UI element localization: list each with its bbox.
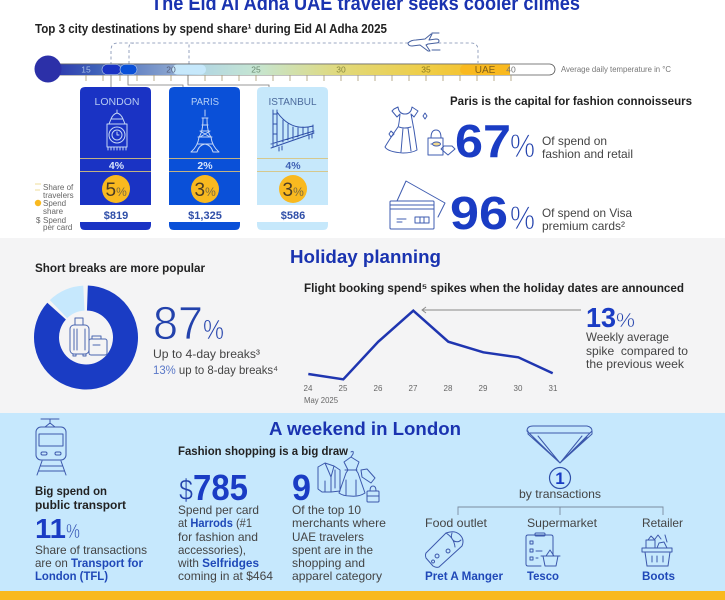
stat: 87 percent short breaks: [153, 297, 278, 377]
heading: flight booking: Flight booking spend⁵ spikes when the holiday dates are announced: [304, 281, 684, 295]
stat: 9 of top 10 merchants: Of the top 10: [292, 503, 361, 517]
panel: Istanbul card: 4%: [285, 160, 301, 172]
panel: Paris card: [169, 87, 240, 230]
stat: 87 percent short breaks: %: [203, 314, 224, 345]
spend share badge: [279, 175, 307, 203]
stat: 96 percent Visa premium cards: [450, 187, 632, 239]
merchant: Boots: Boots: [642, 569, 675, 583]
stat: 96 percent Visa premium cards: 96: [450, 187, 508, 239]
heading: A weekend in London: A weekend in London: [269, 419, 461, 439]
temperature thermometer scale: 40: [506, 64, 516, 74]
panel: London card: 4%: [109, 160, 125, 172]
legend: Share of: [43, 183, 74, 192]
icon: plane: [408, 33, 440, 51]
merchant: Tesco: Tesco: [527, 569, 559, 583]
merchant: Tesco: [526, 516, 598, 583]
heading: short breaks: Short breaks are more popular: [35, 261, 205, 275]
temperature thermometer scale: 25: [251, 64, 261, 74]
stat: 785 dollars at Harrods: $: [179, 474, 193, 507]
text block: public transport: %: [66, 521, 80, 543]
icon: medal: 1: [555, 469, 565, 488]
temperature thermometer scale: 15: [81, 64, 91, 74]
icon: credit cards: [390, 181, 445, 229]
panel: Paris card: $1,325: [188, 210, 222, 222]
stat: 96 percent Visa premium cards: Of spend on Visa: [542, 206, 632, 220]
stat: 67 percent fashion and retail: fashion and retail: [542, 147, 633, 161]
stat: 785 dollars at Harrods: accessories),: [178, 543, 246, 557]
merchant: Pret A Manger: [425, 516, 503, 583]
stat: 96 percent Visa premium cards: premium cards²: [542, 219, 625, 233]
panel: Istanbul card: [257, 87, 328, 230]
line chart: flight booking spend: [304, 311, 558, 405]
panel: Istanbul card: $586: [281, 210, 305, 222]
text block: public transport: London (TFL): [35, 569, 108, 583]
spend share badge: 3%: [194, 180, 216, 201]
stat: 13 percent weekly spike: 13: [586, 302, 616, 333]
stat: 87 percent short breaks: 87: [153, 297, 203, 349]
icon: train: [36, 419, 66, 475]
stat: 9 of top 10 merchants: spent are in the: [292, 543, 373, 557]
panel: Paris card: 2%: [197, 160, 213, 172]
stat: 87 percent short breaks: 13% up to 8-day breaks⁴: [153, 363, 278, 377]
temperature thermometer scale: 35: [421, 64, 431, 74]
stat: 9 of top 10 merchants: 9: [292, 467, 311, 508]
stat: 9 of top 10 merchants: [292, 467, 386, 583]
legend: $: [36, 216, 41, 225]
panel: Paris card: PARIS: [191, 96, 219, 108]
stat: 785 dollars at Harrods: [177, 467, 273, 583]
text block: public transport: Share of transactions: [35, 543, 147, 557]
heading: fashion shopping: Fashion shopping is a big draw: [178, 444, 349, 458]
merchant: Pret A Manger: Food outlet: [425, 516, 488, 530]
legend: per card: [43, 223, 72, 232]
legend: travelers: [43, 191, 74, 200]
icon: checklist and basket: [526, 533, 560, 566]
line chart: flight booking spend: 28: [444, 384, 453, 393]
legend: Spend: [43, 199, 66, 208]
stat: 13 percent weekly spike: spike compared to: [586, 344, 688, 358]
arrow to peak: [422, 307, 581, 313]
line chart: flight booking spend: 30: [514, 384, 523, 393]
icon: Eiffel tower: [191, 110, 219, 152]
text block: public transport: [35, 484, 147, 583]
spend share badge: [191, 175, 219, 203]
stat: 785 dollars at Harrods: Spend per card: [178, 503, 259, 517]
merchant: Pret A Manger: Pret A Manger: [425, 569, 503, 583]
tree connector: [458, 507, 663, 515]
icon: shopping basket: [642, 535, 672, 566]
text block: public transport: Big spend on: [35, 484, 107, 498]
spend share badge: 5%: [106, 180, 127, 201]
spend share badge: 3%: [282, 180, 304, 201]
stat: 785 dollars at Harrods: with Selfridges: [177, 556, 259, 570]
text block: public transport: public transport: [35, 498, 126, 512]
line chart: flight booking spend: 27: [409, 384, 418, 393]
line chart: flight booking spend: 25: [339, 384, 348, 393]
stat: 9 of top 10 merchants: UAE travelers: [292, 530, 364, 544]
panel: London card: [80, 87, 151, 230]
stat: 13 percent weekly spike: [586, 302, 688, 371]
stat: 13 percent weekly spike: Weekly average: [586, 330, 669, 344]
icon: Big Ben: [107, 110, 127, 150]
merchant: Boots: Retailer: [642, 516, 683, 530]
icon: luggage: [70, 318, 107, 356]
spend share badge: [102, 175, 130, 203]
legend: share: [43, 207, 64, 216]
stat: 785 dollars at Harrods: 785: [193, 467, 248, 508]
donut chart: [47, 298, 126, 377]
icon: clothes and bag: [318, 451, 379, 502]
stat: 785 dollars at Harrods: coming in at $464: [178, 569, 273, 583]
stat: 9 of top 10 merchants: merchants where: [292, 516, 386, 530]
line chart: flight booking spend: May 2025: [304, 396, 339, 405]
legend: [35, 183, 74, 232]
stat: 67 percent fashion and retail: Of spend on: [542, 134, 607, 148]
temperature thermometer scale: 20: [166, 64, 176, 74]
stat: 785 dollars at Harrods: for fashion and: [178, 530, 258, 544]
merchant: Tesco: Supermarket: [527, 516, 598, 530]
merchant: Boots: [642, 516, 683, 583]
line chart: flight booking spend: 26: [374, 384, 383, 393]
icon: wrap: [426, 532, 463, 567]
text block: public transport: are on Transport for: [35, 556, 143, 570]
stat: 67 percent fashion and retail: %: [510, 128, 535, 164]
panel: Istanbul card: ISTANBUL: [268, 96, 317, 108]
line chart: flight booking spend: 29: [479, 384, 488, 393]
temperature thermometer scale: UAE: [475, 65, 496, 76]
temperature thermometer scale: [34, 43, 671, 87]
label: by transactions: by transactions: [519, 487, 601, 501]
panel: London card: LONDON: [94, 96, 140, 108]
icon: dress and handbag: [385, 107, 455, 155]
text block: public transport: 11: [35, 513, 66, 544]
stat: 9 of top 10 merchants: apparel category: [292, 569, 382, 583]
heading: Holiday planning: Holiday planning: [290, 247, 441, 267]
line chart: flight booking spend: 24: [304, 384, 313, 393]
heading: top 3 cities: Top 3 city destinations by spend share¹ during Eid Al Adha 2025: [35, 21, 387, 36]
panel: London card: $819: [104, 210, 128, 222]
temperature thermometer scale: Average daily temperature in °C: [561, 65, 671, 74]
temperature thermometer scale: 30: [336, 64, 346, 74]
stat: 87 percent short breaks: Up to 4-day breaks³: [153, 347, 260, 361]
stat: 13 percent weekly spike: the previous week: [586, 357, 685, 371]
stat: 96 percent Visa premium cards: %: [510, 200, 535, 236]
legend: Spend: [43, 216, 66, 225]
stat: 67 percent fashion and retail: [455, 115, 633, 167]
icon: medal: [527, 426, 592, 488]
icon: bridge: [271, 110, 314, 151]
stat: 785 dollars at Harrods: at Harrods (#1: [178, 516, 252, 530]
stat: 13 percent weekly spike: %: [616, 310, 635, 332]
stat: 67 percent fashion and retail: 67: [455, 115, 511, 167]
stat: 9 of top 10 merchants: shopping and: [292, 556, 365, 570]
line chart: flight booking spend: 31: [549, 384, 558, 393]
heading: Paris fashion: Paris is the capital for fashion connoisseurs: [450, 94, 692, 108]
